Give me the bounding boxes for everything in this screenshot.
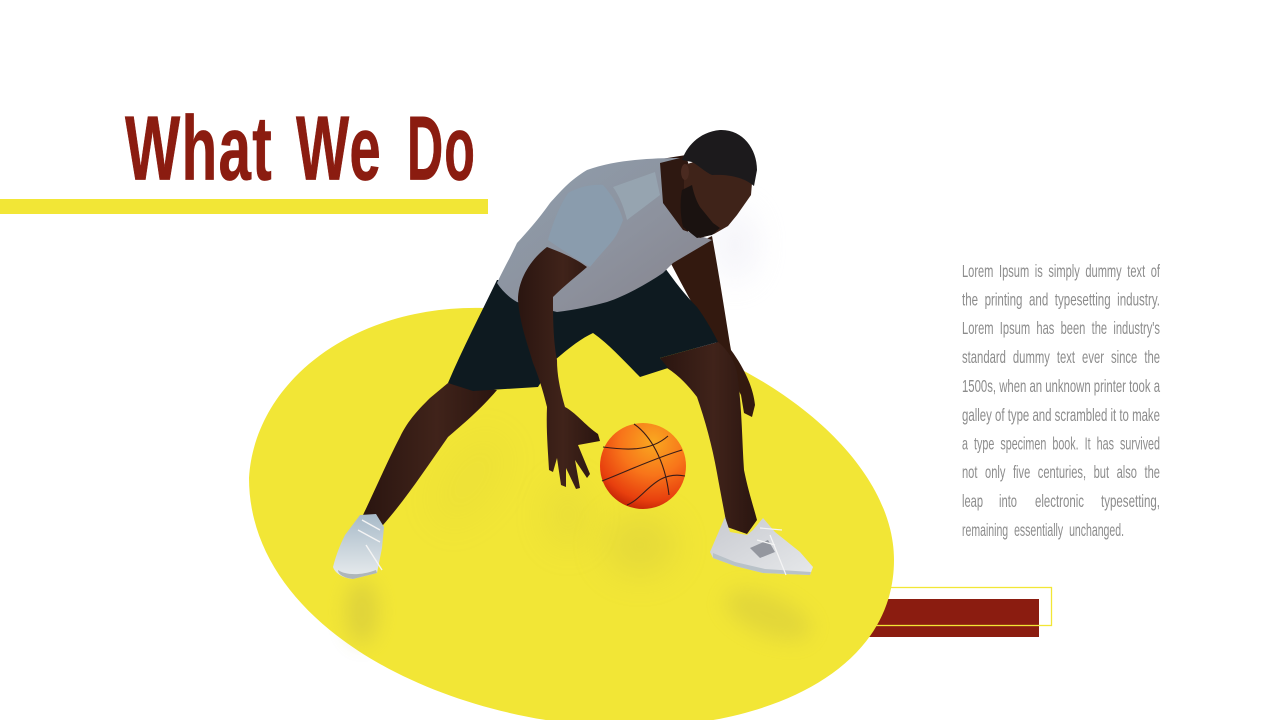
shirt shoulder panel: [613, 172, 660, 220]
body text paragraph: the printing and typesetting industry.: [962, 290, 1160, 310]
shirt: [497, 158, 712, 312]
title: What: [125, 98, 273, 200]
body text paragraph: [962, 261, 1160, 540]
body text paragraph: into: [999, 491, 1017, 511]
sleeve detail: [548, 185, 623, 267]
right sneaker: [710, 517, 813, 575]
body text paragraph: a type specimen book. It has survived: [962, 434, 1160, 454]
dark red accent bar: [840, 599, 1039, 637]
yellow outline box: [860, 588, 1052, 626]
neck: [655, 155, 702, 234]
face: [684, 160, 752, 238]
hair: [682, 130, 757, 186]
title: We: [296, 98, 382, 200]
yellow organic blob: [249, 308, 894, 720]
title: Do: [407, 98, 476, 200]
dribbling arm: [518, 247, 600, 489]
body text paragraph: Lorem Ipsum is simply dummy text of: [962, 261, 1160, 281]
body text paragraph: not only five centuries, but also the: [962, 462, 1160, 482]
left sneaker: [333, 514, 384, 579]
body text paragraph: leap: [962, 491, 983, 511]
far arm: [668, 236, 755, 417]
body text paragraph: 1500s, when an unknown printer took a: [962, 376, 1160, 396]
body text paragraph: standard dummy text ever since the: [962, 347, 1160, 367]
right leg: [660, 342, 757, 534]
shorts: [448, 265, 718, 391]
body text paragraph: typesetting,: [1101, 491, 1160, 511]
body text paragraph: remaining essentially unchanged.: [962, 520, 1124, 540]
left leg: [363, 383, 497, 525]
soft shadows beneath the player: [346, 209, 818, 651]
body text paragraph: galley of type and scrambled it to make: [962, 405, 1160, 425]
ear: [681, 164, 689, 180]
body text paragraph: Lorem Ipsum has been the industry's: [962, 318, 1160, 338]
body text paragraph: electronic: [1035, 491, 1084, 511]
yellow title underline: [0, 199, 488, 214]
title: [125, 98, 476, 200]
basketball player: [333, 130, 813, 579]
beard: [681, 185, 720, 238]
basketball: [600, 423, 686, 509]
